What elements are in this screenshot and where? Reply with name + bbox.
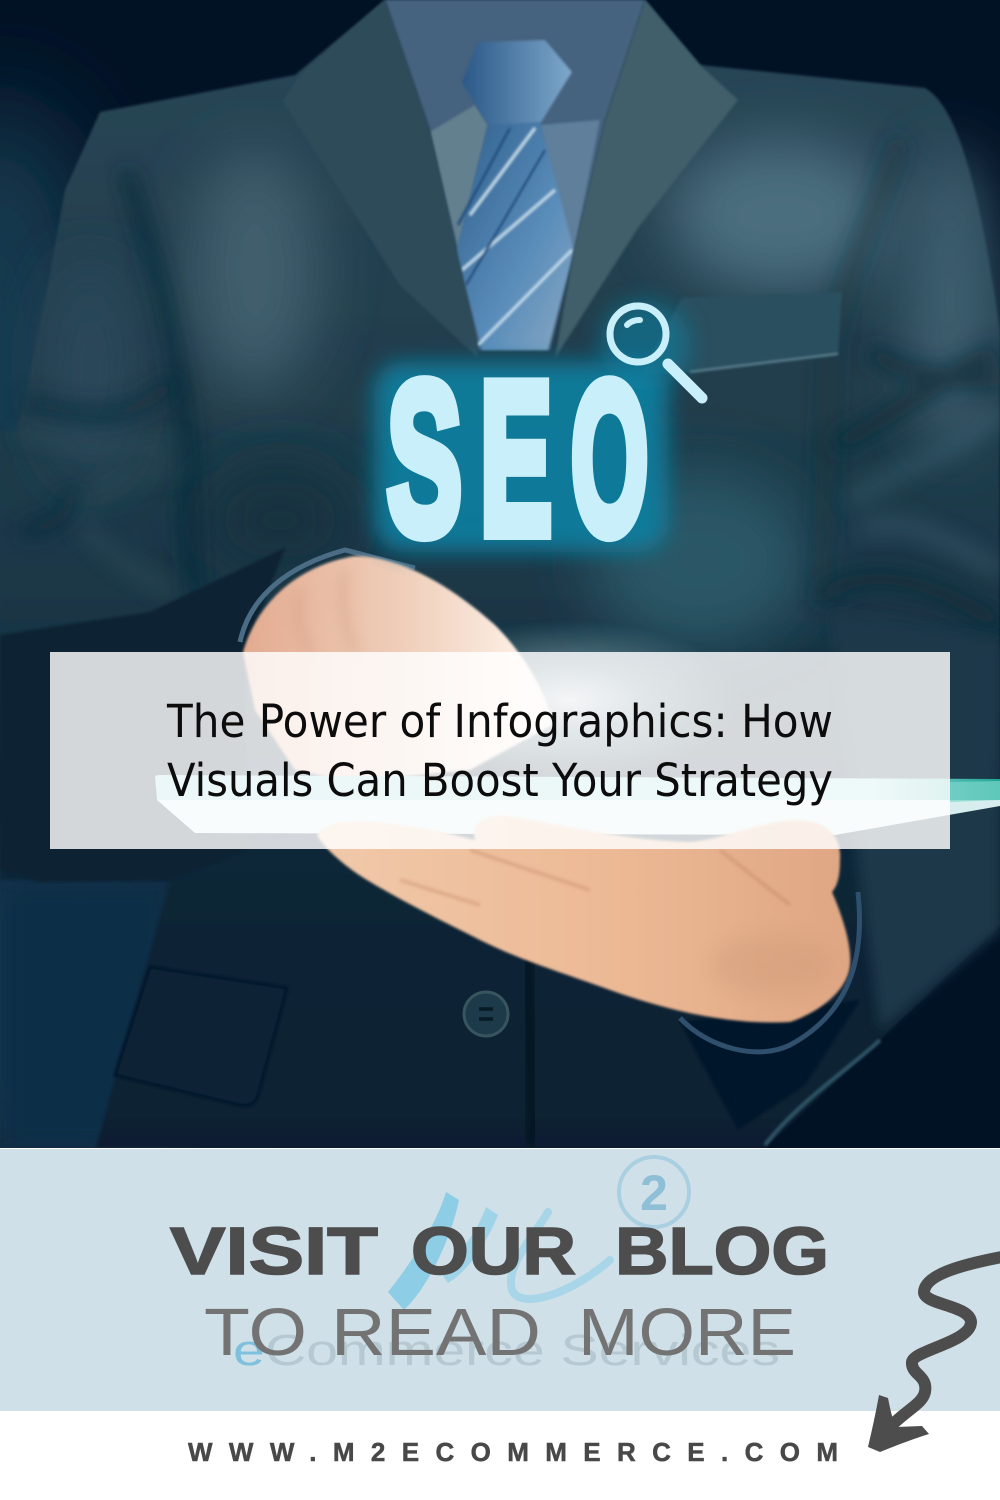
left lapel bbox=[283, 0, 478, 358]
SEO letters: S bbox=[387, 339, 462, 579]
SEO letters bbox=[387, 338, 648, 580]
arrow pointing to website bbox=[868, 1257, 1000, 1452]
magnifier glow bbox=[600, 300, 690, 390]
left forearm bbox=[0, 548, 285, 882]
call-to-action banner bbox=[0, 1149, 1000, 1411]
right sleeve folds bbox=[820, 350, 1000, 625]
right chest highlight bbox=[670, 140, 890, 290]
neon glow bbox=[374, 362, 668, 552]
watermark logo: eCommerce Services bbox=[233, 1326, 780, 1375]
shirt bbox=[385, 0, 645, 350]
right hand shirt sleeve cuff bbox=[240, 550, 415, 642]
left sleeve folds bbox=[20, 432, 185, 590]
tablet bbox=[155, 775, 1000, 835]
right forearm bbox=[830, 610, 1000, 1030]
necktie bbox=[456, 40, 574, 350]
SEO letters: O bbox=[571, 338, 648, 579]
dark studio backdrop bbox=[0, 0, 1000, 1190]
jacket button bbox=[464, 992, 508, 1036]
watermark logo bbox=[233, 1157, 780, 1375]
headline: visit our blog: VISIT bbox=[170, 1214, 378, 1289]
subhead: to read more: MORE bbox=[578, 1295, 796, 1370]
magnifying glass icon bbox=[610, 306, 702, 398]
headline: visit our blog bbox=[170, 1214, 829, 1289]
headline: visit our blog: OUR bbox=[411, 1214, 576, 1289]
lower pocket flap bbox=[115, 967, 287, 1106]
glow above tablet bbox=[505, 626, 686, 750]
right lapel bbox=[555, 0, 738, 358]
headline: visit our blog: BLOG bbox=[615, 1214, 829, 1289]
centre seam bbox=[527, 930, 533, 1148]
title panel bbox=[50, 652, 950, 849]
website address: WWW.M2ECOMMERCE.COM bbox=[188, 1437, 838, 1467]
title text bbox=[166, 695, 833, 807]
suit jacket bbox=[0, 0, 1000, 1148]
subhead: to read more: READ bbox=[331, 1295, 541, 1370]
breast pocket bbox=[668, 292, 842, 374]
photo: businessman in suit bbox=[0, 0, 1000, 1190]
title text: Visuals Can Boost Your Strategy bbox=[167, 754, 833, 807]
SEO neon graphic bbox=[374, 300, 702, 580]
subhead: to read more: TO bbox=[204, 1295, 307, 1370]
upper pointing hand bbox=[243, 556, 552, 782]
title text: The Power of Infographics: How bbox=[166, 695, 833, 748]
right armhole seam bbox=[820, 140, 900, 600]
watermark logo: 2 bbox=[640, 1165, 668, 1221]
left armhole seam bbox=[125, 170, 195, 600]
lower right sleeve flap bbox=[680, 1000, 860, 1130]
SEO letters: E bbox=[480, 338, 552, 580]
lower hand jacket cuff bbox=[680, 892, 860, 1052]
lower open hand bbox=[317, 816, 850, 1023]
subhead: to read more bbox=[204, 1295, 796, 1370]
left chest highlight bbox=[190, 150, 320, 390]
